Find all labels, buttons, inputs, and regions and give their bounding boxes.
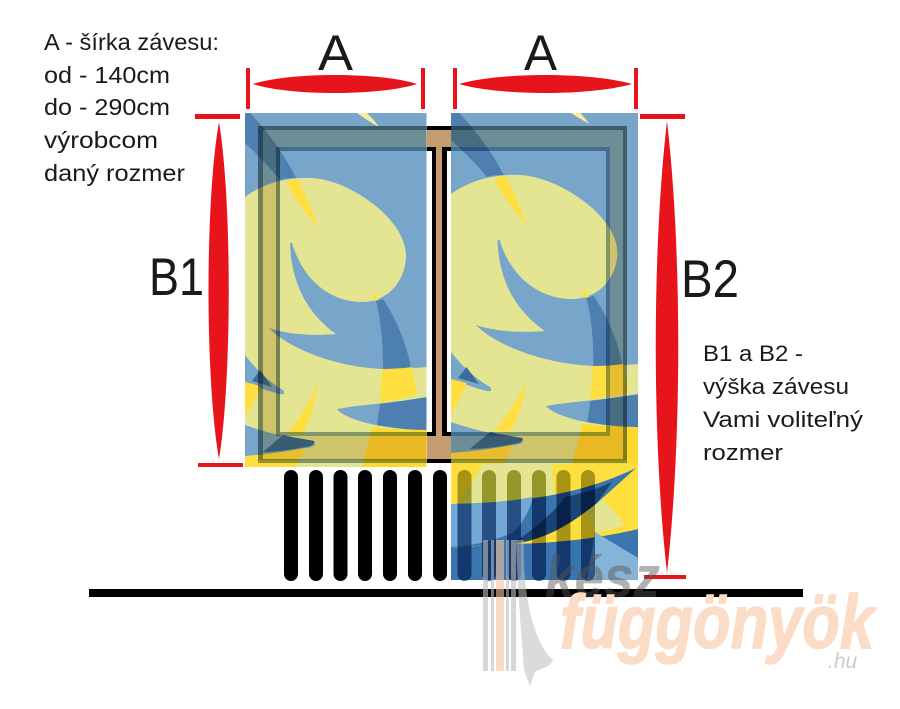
label A left: A [318, 25, 354, 81]
dimension B1 [195, 114, 243, 467]
window frame shaded band through curtains [258, 126, 627, 460]
label B1: B1 [149, 248, 204, 307]
window frame with centre mullion [427, 126, 451, 463]
width note: A - šírka závesu: [44, 29, 219, 55]
height note: B1 a B2 - [703, 341, 803, 366]
dimension B2 [640, 114, 686, 579]
watermark word kész: kész [545, 545, 660, 610]
watermark domain: .hu [828, 650, 858, 673]
label A right: A [524, 25, 558, 81]
width note [44, 29, 219, 186]
right curtain [451, 110, 639, 581]
right curtain lower pale band [458, 464, 555, 504]
left curtain [245, 113, 427, 467]
width note: výrobcom [44, 127, 158, 153]
dimension A right [453, 68, 638, 109]
width note: od - 140cm [44, 62, 170, 88]
watermark curtain icon [483, 540, 553, 686]
dimension A left [246, 68, 425, 109]
height note [703, 341, 864, 465]
width note: daný rozmer [44, 160, 185, 186]
floor line [89, 589, 803, 597]
watermark logo [483, 540, 877, 686]
window frame dark outlines through curtains [258, 126, 627, 463]
label B2: B2 [681, 250, 739, 309]
height note: rozmer [703, 440, 784, 465]
right curtain lower blue waves [451, 468, 636, 548]
height note: Vami voliteľný [703, 407, 864, 432]
width note: do - 290cm [44, 94, 170, 120]
radiator [284, 470, 595, 581]
height note: výška závesu [703, 374, 849, 399]
